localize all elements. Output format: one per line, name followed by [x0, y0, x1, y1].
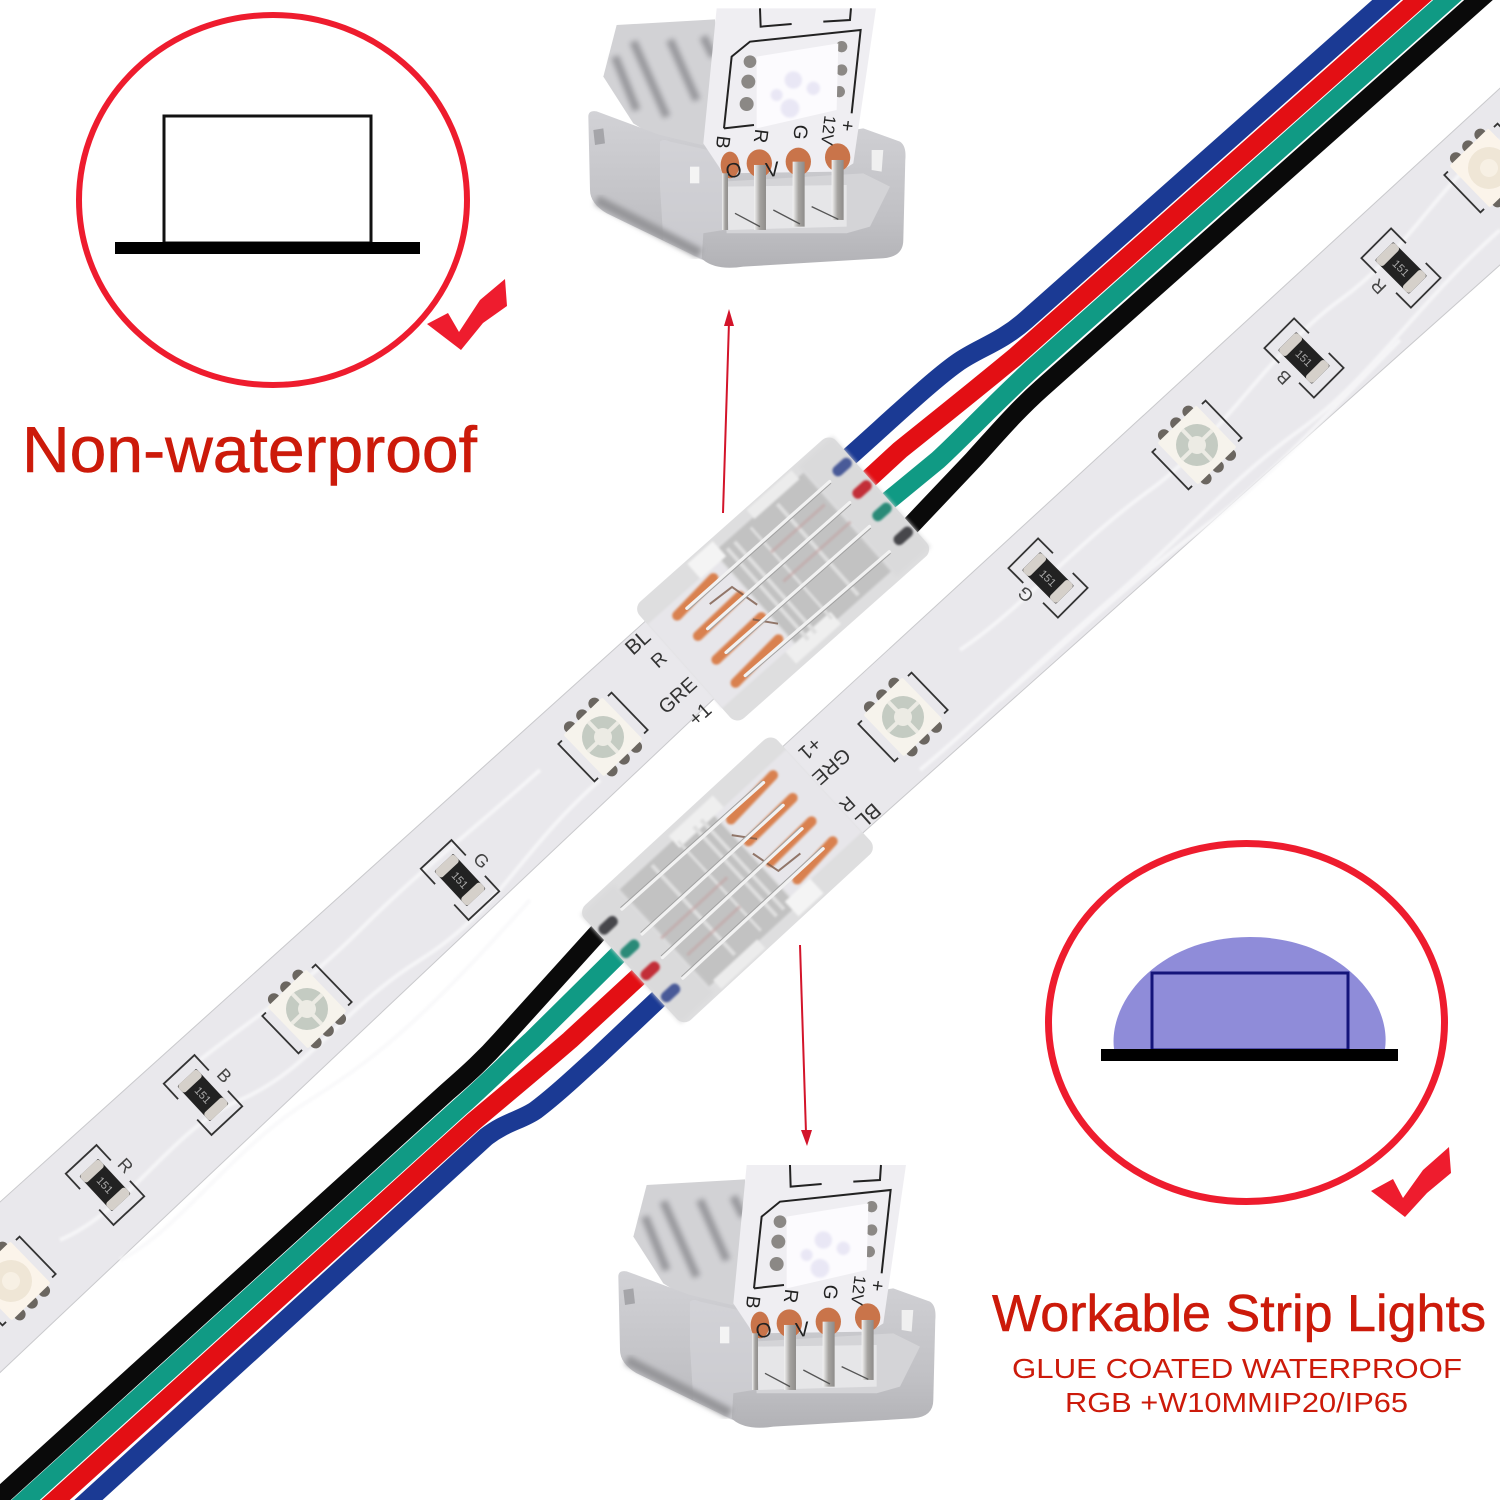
strip print labels [621, 625, 716, 731]
label R: R [1367, 275, 1390, 298]
resistor: G: 151 [449, 870, 470, 891]
resistor: G [1008, 538, 1088, 618]
resistor: R [1361, 228, 1441, 308]
bottom connector close-up photo: B [741, 1294, 763, 1310]
upper wire bundle [840, 0, 1492, 537]
resistor: B [164, 1055, 242, 1135]
subheading: RGB spec: RGB +W10MMIP20/IP65 [1065, 1387, 1408, 1418]
top connector close-up photo: + [836, 119, 858, 132]
LED chip [1145, 393, 1249, 497]
bottom connector close-up photo: G [818, 1283, 841, 1301]
top connector close-up photo: R [749, 128, 771, 144]
subheading: glue coated waterproof: GLUE COATED WATERPROOF [1012, 1353, 1462, 1384]
resistor: R [66, 1145, 144, 1225]
resistor: B [1264, 318, 1344, 398]
LED chip [551, 685, 655, 789]
top connector close-up photo [588, 8, 906, 268]
LED chip [255, 957, 359, 1061]
label B: B [213, 1064, 236, 1087]
bottom connector close-up photo: R [779, 1288, 801, 1304]
top connector close-up photo: B [711, 134, 733, 150]
lower inline connector [578, 733, 877, 1026]
bottom connector close-up photo: V [794, 1318, 811, 1342]
strip print labels: R [834, 791, 859, 816]
resistor: G [421, 840, 499, 920]
diagram: non-waterproof cross-section [79, 15, 467, 385]
label G: G [1014, 582, 1038, 606]
strip print labels: +1 [685, 699, 716, 731]
strip print labels: GRE [807, 743, 854, 789]
strip print labels: BL [621, 625, 655, 660]
top connector close-up photo: O [724, 158, 743, 183]
flex strip end [733, 1165, 906, 1333]
bottom connector close-up photo: + [866, 1279, 888, 1292]
top connector close-up photo: G [788, 123, 811, 141]
label R: R [114, 1154, 137, 1177]
resistor: R: 151 [1390, 258, 1411, 279]
strip print labels [794, 732, 885, 833]
label B: B [1272, 366, 1295, 389]
resistor: B: 151 [192, 1085, 213, 1106]
right LED strip [730, 79, 1500, 880]
LED chip [851, 665, 955, 769]
strip print labels: +1 [794, 732, 825, 764]
diagram: glue coated cross-section [1048, 844, 1444, 1202]
flex strip end [703, 8, 876, 173]
left LED strip [0, 554, 790, 1382]
upper inline connector [633, 433, 933, 725]
lower wire bundle [0, 925, 668, 1500]
bottom connector close-up photo [618, 1165, 936, 1428]
arrow: up to top connector [723, 309, 734, 513]
strip print labels: R [647, 648, 672, 673]
top connector close-up photo: V [764, 158, 781, 182]
heading: Workable Strip Lights: Workable Strip Lights [992, 1285, 1486, 1343]
strip print labels: GRE [655, 673, 702, 719]
arrow: down to bottom connector [800, 945, 812, 1146]
bottom connector close-up photo: 12V [847, 1275, 870, 1307]
heading: Non-waterproof: Non-waterproof [22, 413, 478, 486]
strip print labels: BL [851, 798, 885, 833]
bottom connector close-up photo: O [754, 1318, 773, 1343]
check mark: non-waterproof [427, 279, 507, 350]
top connector close-up photo: 12V [817, 115, 840, 147]
resistor: B: 151 [1293, 348, 1314, 369]
resistor: G: 151 [1037, 568, 1058, 589]
LED chip [0, 1229, 63, 1333]
resistor: R: 151 [94, 1175, 115, 1196]
check mark: glue coated [1371, 1147, 1451, 1217]
label G: G [469, 849, 493, 873]
LED chip [1437, 116, 1500, 220]
